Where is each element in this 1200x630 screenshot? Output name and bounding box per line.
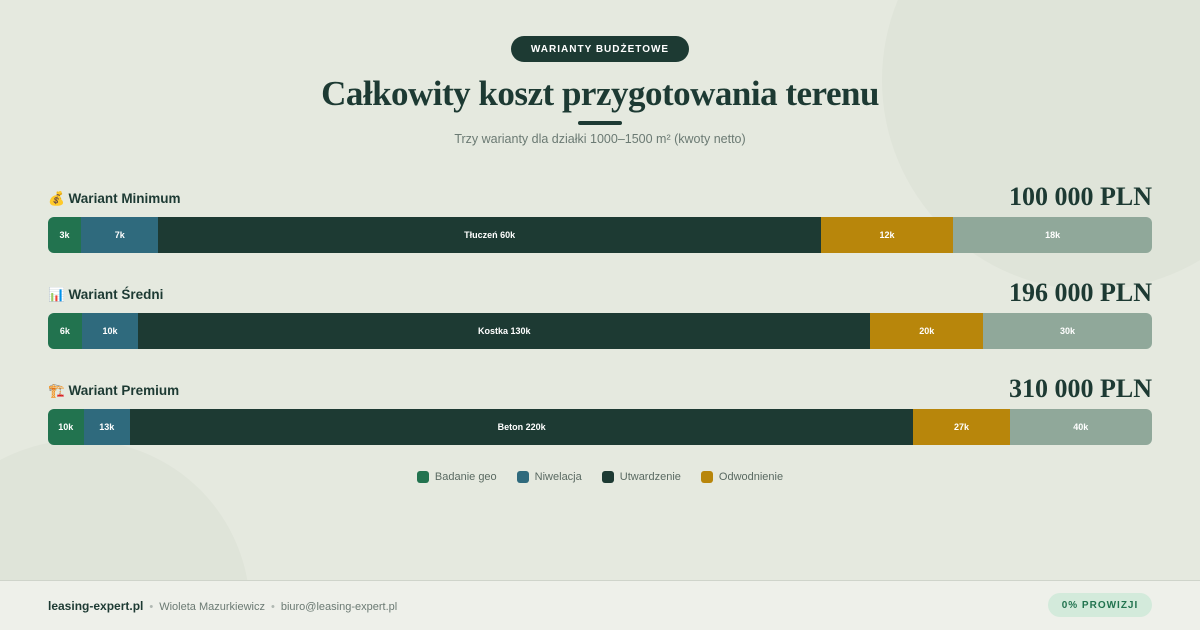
- label: 🏗️ Wariant Premium: [48, 383, 179, 398]
- bar chart: Beton 220k: [498, 422, 546, 432]
- bar chart: [48, 409, 1152, 445]
- price: 100 000 PLN: [1009, 182, 1152, 211]
- bar chart: 20k: [919, 326, 934, 336]
- bar chart: Kostka 130k: [478, 326, 531, 336]
- legend: Utwardzenie: [620, 471, 681, 483]
- legend: Odwodnienie: [719, 471, 783, 483]
- legend: Badanie geo: [435, 471, 497, 483]
- badge: [1048, 593, 1152, 617]
- bar chart: Tłuczeń 60k: [464, 230, 515, 240]
- bar chart: 10k: [58, 422, 73, 432]
- price: 196 000 PLN: [1009, 278, 1152, 307]
- bar chart: 30k: [1060, 326, 1075, 336]
- title: Całkowity koszt przygotowania terenu: [321, 74, 879, 113]
- bar chart: 6k: [60, 326, 70, 336]
- label: 📊 Wariant Średni: [48, 287, 163, 302]
- panel: wariant premium: [48, 374, 1152, 445]
- bar chart: 18k: [1045, 230, 1060, 240]
- bar chart: 13k: [99, 422, 114, 432]
- bar chart: 3k: [60, 230, 70, 240]
- subtitle: Trzy warianty dla działki 1000–1500 m² (kwoty netto): [454, 132, 746, 146]
- footer: [0, 580, 1200, 630]
- legend: [417, 471, 783, 483]
- bar chart: 40k: [1073, 422, 1088, 432]
- panel: wariant sredni: [48, 278, 1152, 349]
- bar chart: 10k: [102, 326, 117, 336]
- bar chart: 7k: [115, 230, 125, 240]
- label: 💰 Wariant Minimum: [48, 191, 181, 206]
- footer text: leasing-expert.pl • Wioleta Mazurkiewicz • biuro@leasing-expert.pl: [48, 599, 397, 613]
- bar chart: 12k: [880, 230, 895, 240]
- bar chart: 27k: [954, 422, 969, 432]
- bar chart: [48, 217, 1152, 253]
- bar chart: [48, 313, 1152, 349]
- badge: 0% PROWIZJI: [1062, 600, 1138, 610]
- header pill: WARIANTY BUDŻETOWE: [531, 44, 669, 54]
- panel: wariant minimum: [48, 182, 1152, 253]
- price: 310 000 PLN: [1009, 374, 1152, 403]
- header pill: [511, 36, 689, 62]
- legend: Niwelacja: [535, 471, 582, 483]
